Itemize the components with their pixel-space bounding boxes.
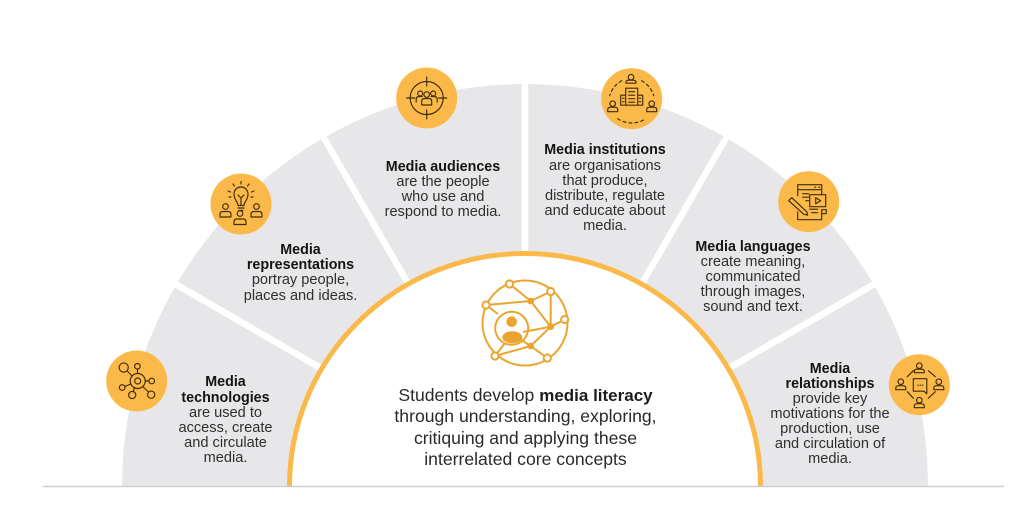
text: media relationships: media. — [808, 451, 852, 467]
icon: central network with person — [482, 280, 568, 366]
text: media institutions: Media institutions — [544, 142, 666, 158]
panel: media institutions — [525, 84, 726, 282]
text: media representations: Media — [280, 242, 322, 258]
text: media languages: sound and text. — [703, 299, 803, 315]
icon: network hub (technologies) — [106, 350, 167, 412]
text: media relationships: production, use — [780, 421, 880, 437]
text: media audiences: Media audiences — [386, 159, 500, 175]
text: media technologies: access, create — [178, 420, 273, 436]
text: media relationships: and circulation of — [775, 436, 886, 452]
baseline — [43, 486, 1004, 488]
panel: media languages — [642, 138, 874, 368]
central text: critiquing and applying these — [414, 428, 637, 448]
icon: people around chat bubble — [889, 354, 950, 415]
central text: interrelated core concepts — [424, 449, 627, 469]
panel: media audiences — [324, 84, 525, 282]
text: media audiences: who use and — [401, 189, 484, 205]
text: media audiences: respond to media. — [385, 204, 501, 220]
panel: media relationships — [728, 285, 928, 486]
text: media representations: portray people, — [252, 272, 349, 288]
text: media relationships: provide key — [793, 391, 868, 407]
center semicircle — [290, 254, 760, 486]
text: media languages: Media languages — [695, 239, 811, 255]
text: media institutions: that produce, — [562, 173, 648, 189]
icon: light bulb and people (representations) — [210, 174, 272, 234]
text: media audiences: are the people — [396, 174, 490, 190]
text: media technologies: technologies — [181, 390, 270, 406]
icon: target with audience — [396, 68, 457, 128]
text: media technologies: are used to — [189, 405, 262, 421]
text: media institutions: and educate about — [545, 203, 665, 219]
text: media technologies: Media — [205, 374, 247, 390]
icon: institution building and people — [601, 68, 662, 129]
text: media technologies: media. — [204, 450, 247, 466]
text: media languages: communicated — [706, 269, 800, 285]
panel: media representations — [176, 138, 408, 368]
icon: document, pencil and video — [778, 171, 839, 232]
text: media relationships: motivations for the — [770, 406, 890, 422]
text: media relationships: Media — [810, 361, 851, 377]
panel: media technologies — [122, 285, 322, 486]
text: media languages: create meaning, — [701, 254, 805, 270]
text: media institutions: are organisations — [549, 158, 661, 174]
central text: through understanding, exploring, — [394, 406, 657, 426]
text: media relationships: relationships — [786, 376, 875, 392]
text: media languages: through images, — [701, 284, 805, 300]
text: media institutions: media. — [583, 218, 627, 234]
text: media representations: representations — [247, 257, 354, 273]
text: media technologies: and circulate — [184, 435, 267, 451]
text: media representations: places and ideas. — [244, 288, 357, 304]
text: media institutions: distribute, regulate — [545, 188, 665, 204]
central text: Students develop media literacy — [398, 385, 653, 405]
